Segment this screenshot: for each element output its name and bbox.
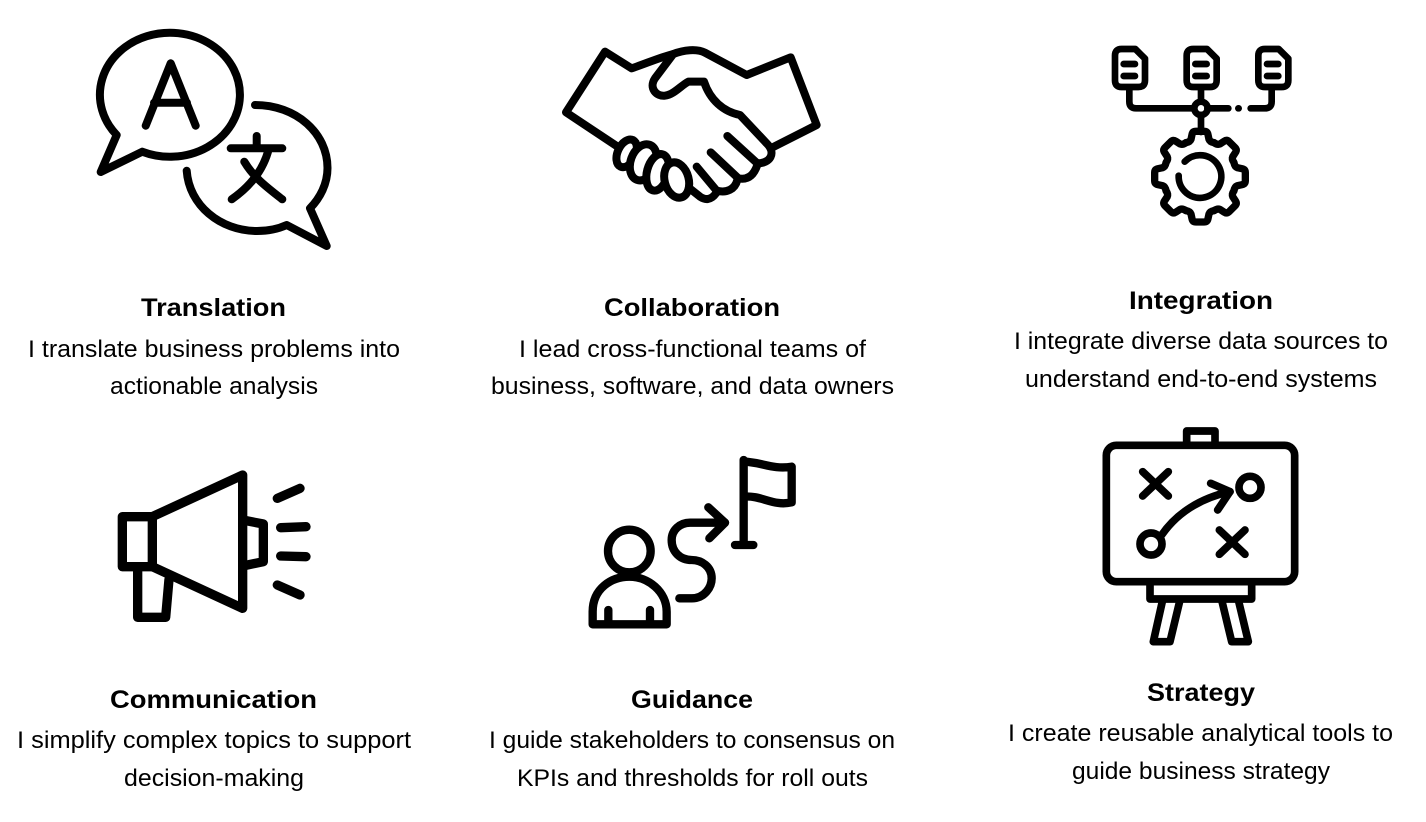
text: communication description: I simplify complex topics to support (17, 727, 411, 754)
panel: strategy (1008, 431, 1393, 785)
text: guidance description: I guide stakeholders to consensus on (489, 727, 895, 754)
text: strategy description: guide business strategy (1072, 758, 1330, 785)
text: collaboration description (491, 336, 894, 400)
heading: Collaboration: Collaboration (604, 294, 780, 322)
icon: megaphone (122, 475, 306, 617)
heading: Communication: Communication (110, 686, 317, 714)
text: communication description: decision-making (124, 765, 304, 792)
panel: translation (28, 33, 400, 400)
heading: Guidance: Guidance (631, 686, 753, 714)
text: guidance description: KPIs and thresholds for roll outs (517, 765, 868, 792)
panel: communication (17, 475, 411, 792)
text: guidance description (489, 727, 895, 792)
text: strategy description (1008, 720, 1393, 785)
panel: guidance (489, 460, 895, 792)
text: translation description (28, 336, 400, 400)
text: integration description: understand end-to-end systems (1025, 366, 1377, 393)
text: collaboration description: I lead cross-functional teams of (519, 336, 866, 363)
text: communication description (17, 727, 411, 792)
heading: Integration: Integration (1129, 287, 1273, 315)
text: translation description: actionable analysis (110, 373, 318, 400)
text: integration description: I integrate diverse data sources to (1014, 328, 1388, 355)
icon: strategy board on easel (1106, 431, 1295, 642)
heading: Translation: Translation (141, 294, 286, 322)
text: integration description (1014, 328, 1388, 393)
panel: integration (1014, 49, 1388, 393)
heading: Strategy: Strategy (1147, 679, 1255, 707)
icon: translation speech bubbles (100, 33, 328, 246)
text: collaboration description: business, software, and data owners (491, 373, 894, 400)
icon: data sources and gear (1115, 49, 1288, 222)
icon: handshake (566, 50, 817, 200)
icon: person, path and flag (593, 460, 792, 624)
panel: collaboration (491, 50, 894, 400)
text: strategy description: I create reusable analytical tools to (1008, 720, 1393, 747)
text: translation description: I translate business problems into (28, 336, 400, 363)
